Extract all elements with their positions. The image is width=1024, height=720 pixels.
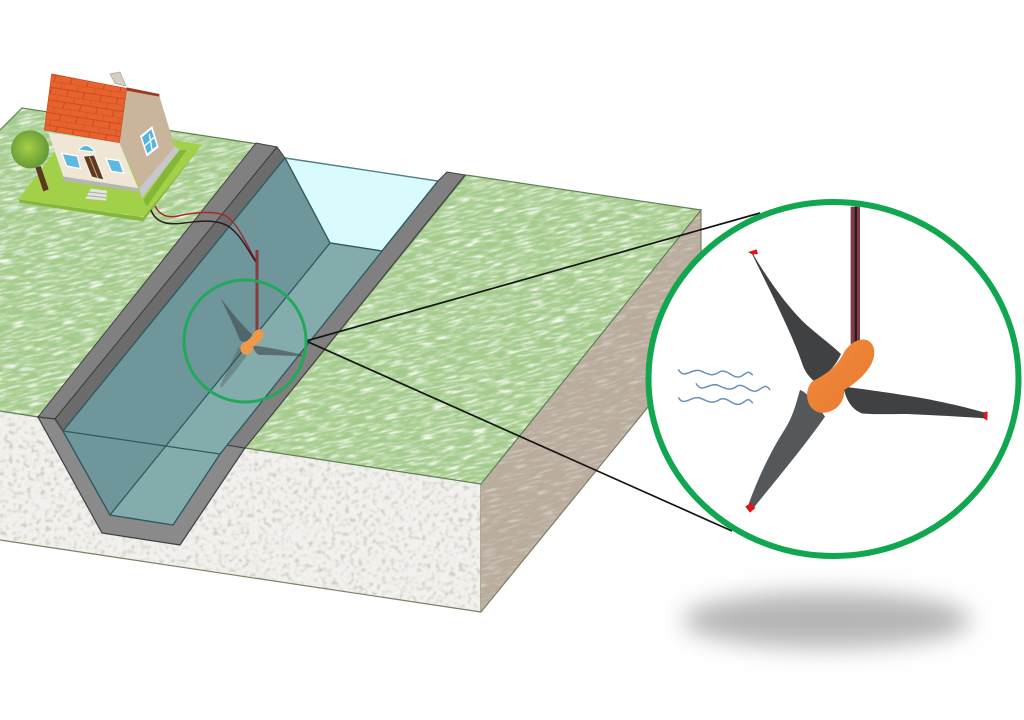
concrete lining, front <box>38 417 245 545</box>
front soil face <box>0 400 490 620</box>
channel back wall <box>285 158 438 251</box>
roof edge <box>127 87 159 97</box>
small turbine <box>220 250 302 387</box>
front wall <box>48 133 138 188</box>
ground block <box>0 107 702 613</box>
door <box>82 154 106 181</box>
hub <box>240 329 264 354</box>
arched window <box>79 145 95 152</box>
concrete rim, right <box>220 172 465 454</box>
left grass surface <box>0 107 256 418</box>
left window <box>62 153 81 169</box>
right soil face <box>481 210 702 612</box>
water current lines <box>678 369 770 404</box>
side wall <box>119 88 175 188</box>
tether <box>256 250 258 336</box>
magnifier ground shadow <box>683 592 971 648</box>
tether <box>851 207 860 348</box>
concrete rim, left <box>38 143 277 419</box>
water over left wall <box>63 158 330 515</box>
house on lawn <box>11 72 202 221</box>
side window <box>140 126 159 157</box>
tree <box>11 130 49 191</box>
small focus ring <box>184 280 306 402</box>
chimney <box>110 72 126 86</box>
magnifier guide lines <box>306 213 760 531</box>
lawn plot <box>18 139 202 221</box>
power cables <box>151 206 257 263</box>
nacelle <box>807 340 874 413</box>
water channel <box>38 143 465 545</box>
base strips <box>63 177 140 192</box>
blades <box>220 299 302 387</box>
turbine blades <box>745 249 988 513</box>
water over floor <box>110 243 382 525</box>
blade tips <box>745 249 988 513</box>
concrete rim, inner left <box>55 147 285 431</box>
right grass surface <box>245 174 702 485</box>
magnified view circle <box>648 202 1018 556</box>
right window <box>106 159 124 173</box>
channel edge lines <box>63 158 438 525</box>
roof <box>44 74 127 143</box>
steps <box>85 189 107 201</box>
